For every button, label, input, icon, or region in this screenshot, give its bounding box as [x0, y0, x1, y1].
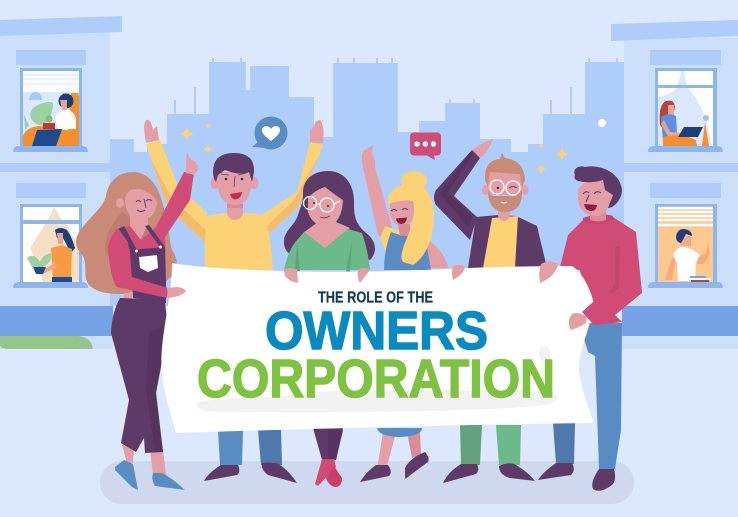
person: woman with long hair and overalls — [76, 152, 198, 490]
title: the role of the: THE ROLE OF THE — [318, 290, 433, 306]
person: woman in green top — [284, 171, 375, 487]
title: owners: OWNERS — [265, 301, 488, 361]
person: blonde woman — [360, 145, 449, 482]
skyline — [110, 58, 624, 306]
banner shadow — [197, 346, 558, 412]
person: bearded man in jacket — [434, 139, 547, 483]
sleeve: lowered arm — [108, 228, 168, 298]
sparkles — [180, 122, 569, 174]
window: woman with laptop — [655, 68, 717, 147]
sills right — [648, 146, 723, 288]
title: corporation: CORPORATION — [197, 349, 555, 409]
window: woman with plant — [20, 204, 82, 283]
left building — [0, 16, 122, 349]
window: woman at home — [655, 204, 717, 283]
moon dot — [598, 119, 606, 127]
speech bubble: dots — [410, 132, 441, 160]
person: man in yellow sweater — [144, 120, 324, 483]
sleeve over banner — [582, 290, 622, 325]
hands holding banner — [167, 262, 587, 330]
banner — [161, 263, 594, 433]
window: woman reading — [20, 68, 82, 147]
sills left — [13, 146, 88, 288]
person: man in pink sweater — [538, 166, 642, 491]
ground shadow — [100, 461, 634, 504]
speech bubble: heart — [252, 116, 288, 150]
right building — [611, 20, 738, 349]
